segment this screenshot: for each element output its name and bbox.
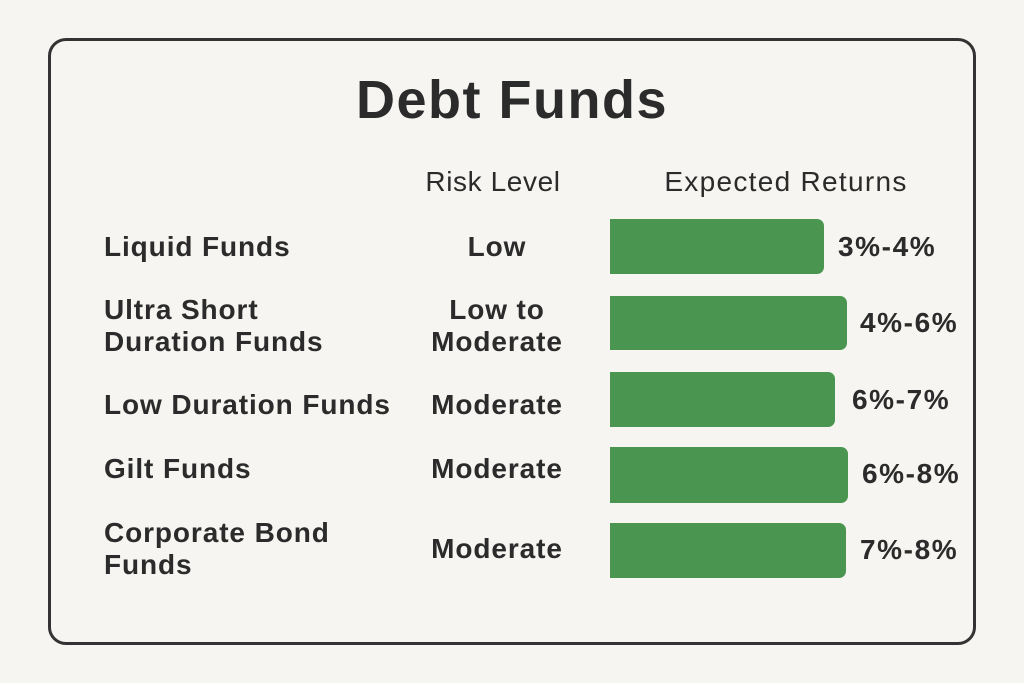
header: expected returns: Expected Returns [664, 166, 908, 197]
row 5 label [104, 517, 330, 580]
row 4 value: 6%-8% [862, 458, 960, 489]
row 5 label: Funds [104, 549, 192, 580]
row 1 label: Liquid Funds [104, 231, 291, 262]
row 4 label: Gilt Funds [104, 453, 251, 484]
row 2 label [104, 294, 323, 357]
row 3 label: Low Duration Funds [104, 389, 391, 420]
row 2 risk [431, 294, 563, 357]
row 2 value: 4%-6% [860, 307, 958, 338]
row 3 value: 6%-7% [852, 384, 950, 415]
row 2 label: Ultra Short [104, 294, 259, 325]
row 5 label: Corporate Bond [104, 517, 330, 548]
header: risk level: Risk Level [425, 166, 561, 197]
row 2 bar [610, 296, 847, 350]
row 3 bar [610, 372, 835, 427]
row 2 risk: Low to [449, 294, 545, 325]
row 2 label: Duration Funds [104, 326, 323, 357]
row 1 value: 3%-4% [838, 231, 936, 262]
row 1 risk: Low [468, 231, 526, 262]
row 3 risk: Moderate [431, 389, 563, 420]
row 2 risk: Moderate [431, 326, 563, 357]
row 5 value: 7%-8% [860, 534, 958, 565]
row 4 bar [610, 447, 848, 503]
title: Debt Funds [356, 70, 668, 130]
row 4 risk: Moderate [431, 453, 563, 484]
row 5 risk: Moderate [431, 533, 563, 564]
row 1 bar [610, 219, 824, 274]
row 5 bar [610, 523, 846, 578]
